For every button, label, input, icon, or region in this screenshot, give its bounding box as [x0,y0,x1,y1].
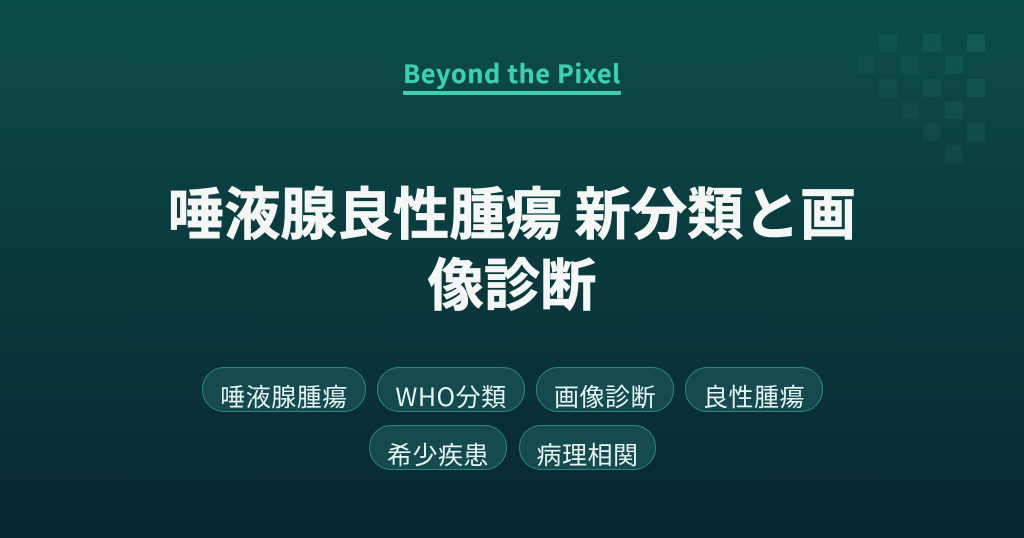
title [168,170,856,322]
brand label: Beyond the Pixel: Beyond the Pixel [403,55,621,91]
tag: 唾液腺腫瘍 [202,367,366,412]
tag: WHO分類 [377,367,525,412]
tag: 良性腫瘍 [685,367,823,412]
tag: 病理相関 [519,425,656,470]
title: 像診断 [428,241,596,322]
title: 唾液腺良性腫瘍 新分類と画 [168,170,856,251]
tag: 希少疾患 [369,425,507,470]
tag: 画像診断 [536,367,674,412]
tags [202,367,823,470]
decorative pixel grid [879,34,985,141]
